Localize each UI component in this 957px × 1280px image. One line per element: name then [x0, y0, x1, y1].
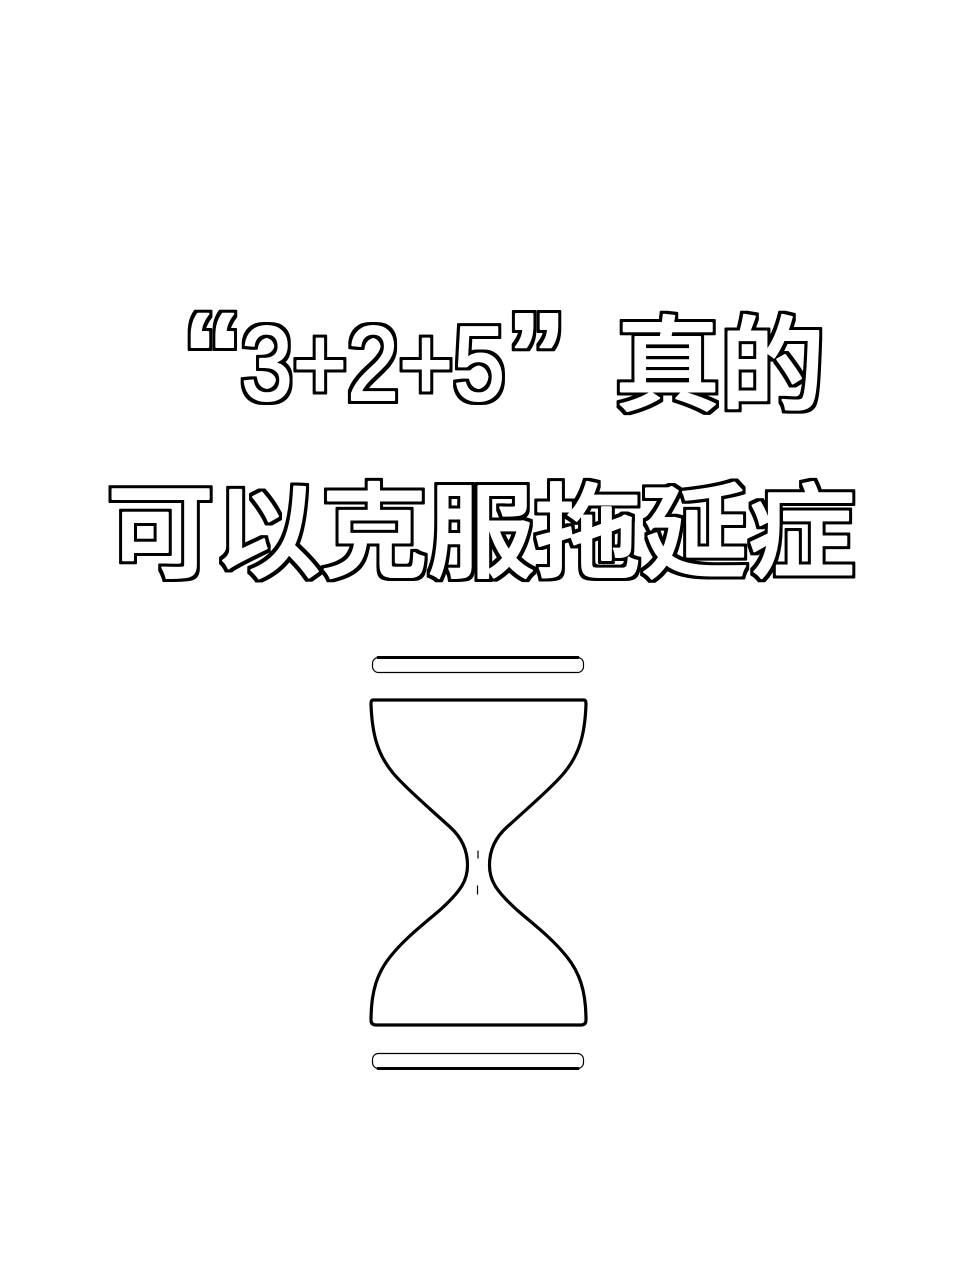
hourglass body	[371, 700, 586, 1025]
icon: hourglass	[371, 658, 586, 1068]
hourglass bottom cap	[372, 1054, 584, 1068]
title line 2: can overcome procrastination: 可以克服拖延症	[107, 476, 855, 591]
hourglass falling sand marks	[476, 851, 479, 894]
title closing quote: ”	[507, 289, 566, 421]
title opening quote: “	[183, 289, 242, 421]
title	[107, 289, 855, 591]
title line 1: 3+2+5: 3+2+5	[241, 305, 505, 423]
hourglass top cap	[372, 658, 584, 672]
title line 1: really: 真的	[615, 309, 825, 424]
